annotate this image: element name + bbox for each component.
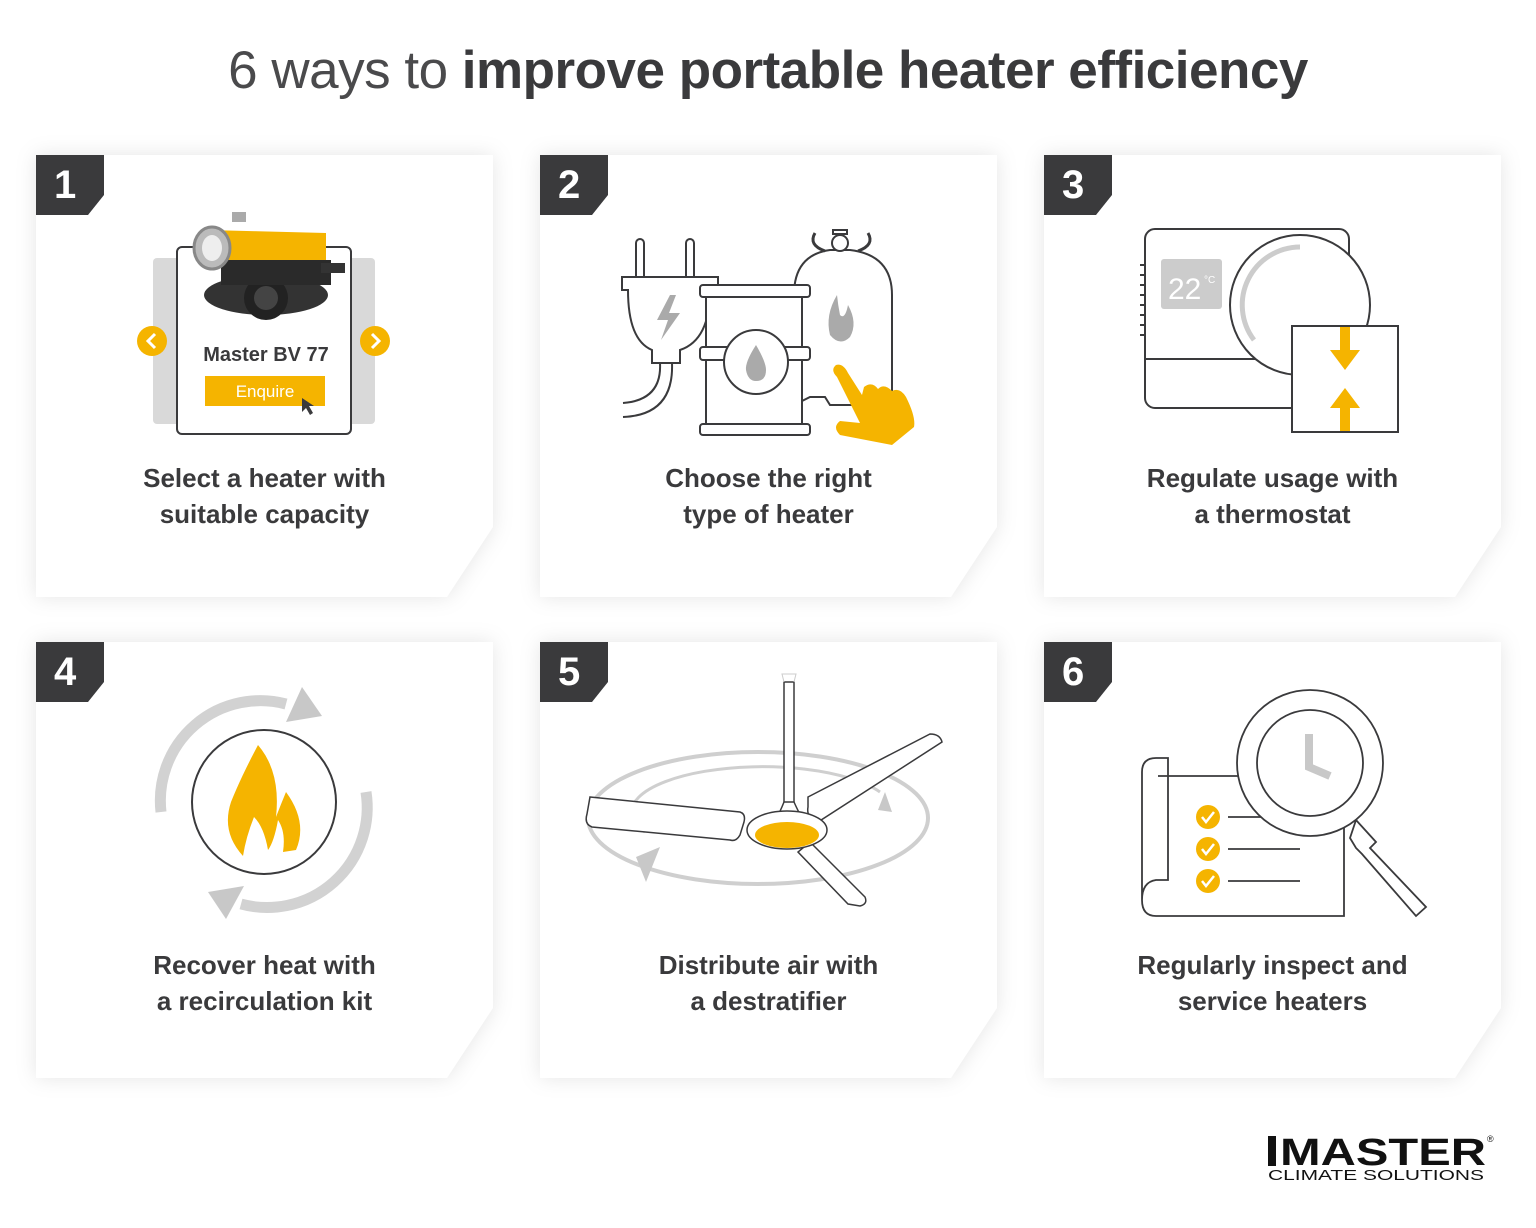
badge 6 [1044,642,1112,702]
icon: inspection checklist [1141,689,1428,918]
badge 1 [36,155,104,215]
badge 2: 2 [558,163,580,207]
panel: 6 inspect [1040,638,1506,1082]
caption 1: Select a heater with [143,463,386,493]
badge 4 [36,642,104,702]
badge 2 [540,155,608,215]
caption 6: Regularly inspect and [1137,950,1408,980]
panel: 4 recirculation [32,638,498,1082]
icon: fuel types [621,229,914,445]
caption 5: Distribute air with [659,950,878,980]
icon: product carousel: Enquire [236,382,294,401]
caption 1: suitable capacity [160,499,369,529]
panel: 1 select heater [32,150,498,602]
badge 3: 3 [1062,163,1084,207]
panel: 2 type of heater [536,150,1002,602]
logo: CLIMATE SOLUTIONS [1268,1167,1484,1184]
icon: ceiling fan [585,674,943,907]
caption 1 [143,463,386,529]
icon: product carousel [137,212,390,435]
icon: recirculation flame [154,687,373,919]
badge 5 [540,642,608,702]
panel: 3 thermostat [1040,150,1506,602]
caption 6: service heaters [1178,986,1367,1016]
badge 1: 1 [54,163,76,207]
caption 3: Regulate usage with [1147,463,1398,493]
caption 4: Recover heat with [153,950,376,980]
logo: ® [1487,1134,1494,1144]
badge 4: 4 [54,650,76,694]
panel: 5 destratifier [536,638,1002,1082]
caption 2 [665,463,872,529]
icon: thermostat: 22 [1168,273,1201,306]
caption 2: type of heater [683,499,854,529]
caption 3: a thermostat [1194,499,1351,529]
caption 5 [659,950,878,1016]
caption 4: a recirculation kit [157,986,372,1016]
logo: MASTER [1280,1132,1486,1174]
icon: product carousel: Master BV 77 [203,344,329,366]
caption 4 [153,950,376,1016]
caption 5: a destratifier [690,986,847,1016]
badge 6: 6 [1062,650,1084,694]
caption 3 [1147,463,1398,529]
icon: thermostat [1140,228,1399,433]
title: 6 ways to improve portable heater efficiency [228,41,1308,100]
logo [1268,1132,1494,1184]
icon: thermostat: °C [1204,275,1215,286]
caption 2: Choose the right [665,463,872,493]
caption 6 [1137,950,1408,1016]
badge 3 [1044,155,1112,215]
badge 5: 5 [558,650,580,694]
